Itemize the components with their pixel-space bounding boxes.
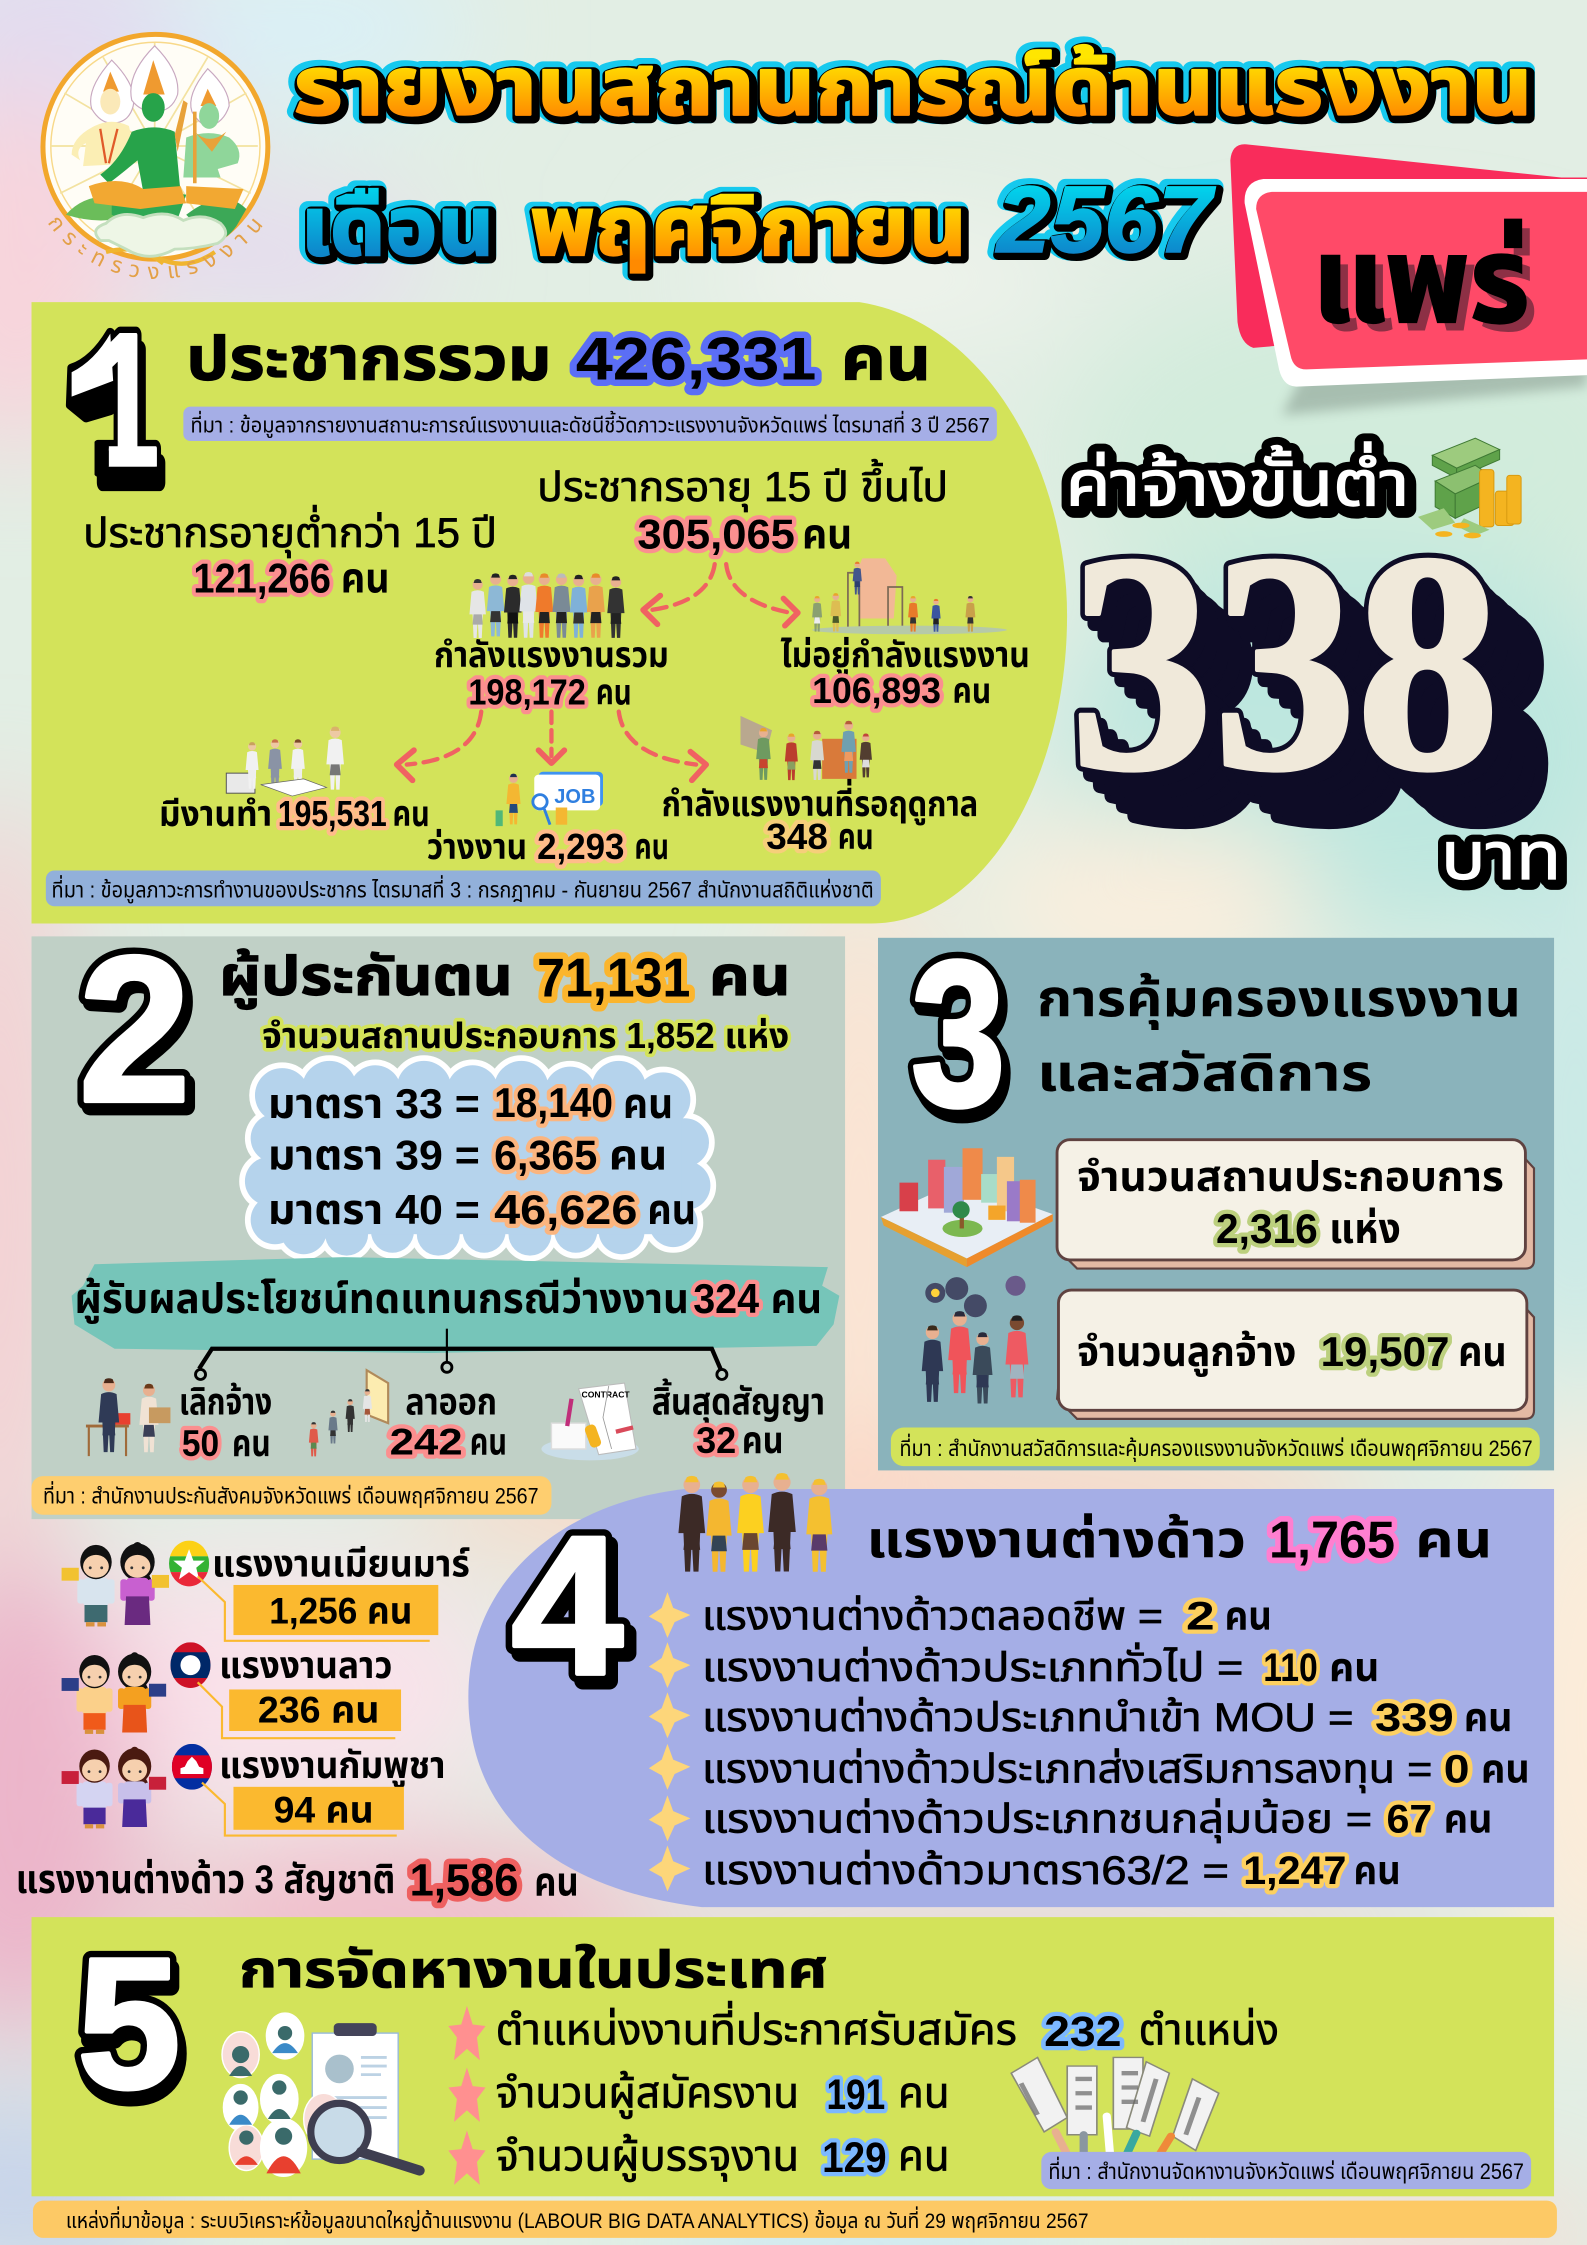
heading: total population xyxy=(186,325,931,392)
number 4: 4 xyxy=(511,1495,623,1716)
unit: baht: บาท xyxy=(1441,819,1561,893)
title: รายงานสถานการณ์ด้านแรงงาน xyxy=(296,44,1535,135)
heading: protection and welfare: การคุ้มครองแรงงาน xyxy=(1037,970,1521,1029)
label: contract ended: สิ้นสุดสัญญา xyxy=(652,1378,825,1425)
stat: population under 15: คน xyxy=(341,555,390,602)
label: unemployed xyxy=(427,827,669,867)
title: รายงานสถานการณ์ด้านแรงงาน xyxy=(294,42,1533,133)
label: employed xyxy=(159,794,430,834)
stat: population under 15: ประชากรอายุต่ำกว่า 15 ปี xyxy=(83,505,497,558)
row: section 63/2: แรงงานต่างด้าวมาตรา63/2 = xyxy=(702,1849,1229,1893)
banner: unemployment benefit xyxy=(72,1257,839,1353)
badge: province name xyxy=(1230,144,1587,415)
icon: employed group xyxy=(226,727,344,796)
title: 2567 xyxy=(995,167,1216,273)
number 3: 3 xyxy=(911,918,1005,1150)
heading: total population: ประชากรรวม xyxy=(186,325,551,392)
big number 338: 338 xyxy=(1077,499,1507,845)
badge: province name: แพร่ xyxy=(1321,223,1538,357)
badge: province name: แพร่ xyxy=(1312,214,1530,348)
nationality: Laos xyxy=(62,1642,401,1738)
heading: insured persons xyxy=(219,946,791,1010)
icon: job search xyxy=(496,772,603,826)
stat: population 15+: คน xyxy=(802,510,852,557)
article 33: คน xyxy=(623,1080,673,1127)
card: employees: จำนวนลูกจ้าง xyxy=(1077,1328,1296,1377)
label: employed: 195,531 xyxy=(278,794,387,834)
nationality: Laos: แรงงานลาว xyxy=(219,1644,392,1686)
icon: construction (outside labour force) xyxy=(812,558,1007,634)
total: three nationalities xyxy=(16,1855,579,1906)
big number 338: 338 xyxy=(1110,531,1540,877)
label: total labour force: คน xyxy=(596,672,632,712)
row: MOU: คน xyxy=(1464,1696,1513,1740)
number 4: 4 xyxy=(511,1495,623,1716)
row: minority xyxy=(649,1795,1492,1843)
label: outside labour force: คน xyxy=(952,671,991,711)
number 1 xyxy=(66,326,166,492)
label: seasonal labour: กำลังแรงงานที่รอฤดูกาล xyxy=(662,778,978,825)
article 33: 18,140 xyxy=(494,1079,613,1126)
source note 3 xyxy=(891,1427,1540,1466)
footer: data source xyxy=(33,2201,1557,2238)
row: investment promotion xyxy=(649,1744,1530,1793)
label: resigned xyxy=(390,1381,507,1463)
flag: Cambodia xyxy=(172,1744,212,1790)
title xyxy=(294,42,1535,276)
total: three nationalities: แรงงานต่างด้าว 3 สัญชาติ xyxy=(16,1857,395,1902)
number 3: 3 xyxy=(911,918,1005,1150)
number 2: 2 xyxy=(79,914,190,1146)
heading: total population: คน xyxy=(841,325,931,392)
nationality: Cambodia xyxy=(62,1744,445,1836)
row: minority: แรงงานต่างด้าวประเภทชนกลุ่มน้อย = xyxy=(702,1798,1372,1843)
heading: minimum wage: ค่าจ้างขั้นต่ำ xyxy=(1069,446,1412,524)
row: section 63/2: 1,247 xyxy=(1243,1849,1346,1893)
panel 5: job placement xyxy=(32,1917,1554,2196)
row: MOU: แรงงานต่างด้าวประเภทนำเข้า MOU = xyxy=(702,1696,1354,1740)
icon: seasonal farmers xyxy=(741,716,872,780)
row: minority: คน xyxy=(1444,1798,1492,1842)
crossed legs xyxy=(66,196,132,220)
card: establishments xyxy=(1057,1140,1534,1269)
label: dismissed: 50 xyxy=(182,1422,219,1464)
heading: minimum wage: ค่าจ้างขั้นต่ำ xyxy=(1066,441,1409,519)
central deity xyxy=(143,60,165,94)
title: รายงานสถานการณ์ด้านแรงงาน xyxy=(294,42,1533,133)
icon: Myanmar couple xyxy=(62,1542,169,1626)
panel 3: labour protection xyxy=(878,918,1554,1470)
big number 338: 338 xyxy=(1070,489,1500,835)
article 39: คน xyxy=(609,1132,667,1179)
title: พฤศจิกายน xyxy=(530,180,967,273)
row: MOU: 339 xyxy=(1375,1696,1454,1740)
article 39 xyxy=(268,1132,667,1179)
panel 2: insured persons xyxy=(32,914,845,1519)
heading: insured persons: 71,131 xyxy=(537,948,690,1009)
source note 2 xyxy=(46,871,881,906)
row: lifetime: คน xyxy=(1225,1594,1272,1638)
icon: Cambodia couple xyxy=(62,1747,166,1828)
flag: Myanmar xyxy=(169,1541,209,1588)
panel 4: migrant workers xyxy=(468,1473,1554,1907)
heading: migrant workers: แรงงานต่างด้าว xyxy=(867,1511,1246,1569)
icon: resigned xyxy=(309,1370,388,1456)
source note 1: ที่มา : ข้อมูลจากรายงานสถานะการณ์แรงงานและดัชนีชี้วัดภาวะแรงงานจังหวัดแพร่ ไตรมาสที่ 3 ปี 2567 xyxy=(190,410,990,438)
row: MOU xyxy=(649,1692,1513,1740)
row: investment promotion: แรงงานต่างด้าวประเภทส่งเสริมการลงทุน = xyxy=(702,1748,1432,1793)
icon: migrant worker group xyxy=(678,1473,832,1572)
article 33 xyxy=(268,1079,673,1127)
label: resigned: ลาออก xyxy=(405,1381,497,1423)
left deity xyxy=(103,72,119,92)
label: seasonal labour: 348 xyxy=(766,817,828,857)
row: placed xyxy=(448,2130,950,2185)
number 1: 1 xyxy=(90,293,159,509)
heading: migrant workers: 1,765 xyxy=(1269,1511,1395,1569)
label: unemployed: ว่างงาน xyxy=(427,827,527,867)
source note: social security xyxy=(32,1476,551,1515)
label: contract ended: คน xyxy=(742,1419,783,1461)
icon: recruitment search xyxy=(222,2013,420,2176)
title: 2567 xyxy=(998,170,1219,276)
article 40 xyxy=(268,1186,696,1233)
row: positions announced: ตำแหน่ง xyxy=(1139,2007,1279,2055)
footer: data source: แหล่งที่มาข้อมูล : ระบบวิเคราะห์ข้อมูลขนาดใหญ่ด้านแรงงาน (LABOUR BIG DATA ANALYTICS) ข้อมูล ณ วันที่ 29 พฤศจิกายน 2567 xyxy=(66,2206,1089,2234)
heading: insured persons: ผู้ประกันตน xyxy=(219,946,513,1010)
source note: social security: ที่มา : สำนักงานประกันสังคมจังหวัดแพร่ เดือนพฤศจิกายน 2567 xyxy=(43,1480,539,1508)
stat: population under 15: 121,266 xyxy=(193,555,331,602)
article 39: 6,365 xyxy=(494,1132,597,1179)
label: resigned: 242 xyxy=(390,1421,463,1463)
tree connector xyxy=(196,1329,727,1380)
stat: population 15+: ประชากรอายุ 15 ปี ขึ้นไป xyxy=(537,459,948,512)
icon: dismissed xyxy=(86,1378,170,1456)
row: general: คน xyxy=(1329,1646,1379,1690)
row: applicants: คน xyxy=(898,2070,950,2118)
article 39: มาตรา 39 = xyxy=(268,1132,480,1179)
nationality: Laos: 236 คน xyxy=(258,1688,380,1730)
arrows from labour force xyxy=(397,712,706,780)
icon: labour force group xyxy=(469,572,624,638)
arrows from population 15+ xyxy=(643,564,798,626)
label: total labour force xyxy=(434,635,669,712)
row: general xyxy=(649,1642,1379,1690)
logo: Ministry of Labour seal: กระทรวงแรงงาน xyxy=(48,218,262,279)
right deity xyxy=(201,89,216,106)
row: applicants: 191 xyxy=(826,2071,885,2119)
big number 338: 338 xyxy=(1087,511,1517,857)
label: unemployed: คน xyxy=(635,827,669,867)
row: placed: 129 xyxy=(822,2134,887,2182)
number 5: 5 xyxy=(77,1920,180,2127)
number 1: 1 xyxy=(95,308,163,523)
article 40: มาตรา 40 = xyxy=(268,1186,480,1233)
article 33: มาตรา 33 = xyxy=(268,1080,480,1127)
cloud xyxy=(96,214,226,256)
nationality: Myanmar xyxy=(62,1541,470,1641)
icon: Laos couple xyxy=(62,1652,166,1734)
label: dismissed: เลิกจ้าง xyxy=(179,1381,272,1423)
title: พฤศจิกายน xyxy=(533,183,970,276)
article 40: 46,626 xyxy=(494,1186,637,1233)
nationality: Myanmar: แรงงานเมียนมาร์ xyxy=(212,1542,470,1584)
title: เดือน xyxy=(301,180,494,273)
flag: Laos xyxy=(170,1642,211,1688)
label: seasonal labour xyxy=(662,778,978,857)
panel 1: population xyxy=(32,293,1067,923)
icon: contract ended: CONTRACT xyxy=(582,1389,630,1399)
logo: Ministry of Labour seal xyxy=(40,32,270,279)
cloud: contributions by article xyxy=(245,1061,710,1256)
source note 2: ที่มา : ข้อมูลภาวะการทำงานของประชากร ไตรมาสที่ 3 : กรกฎาคม - กันยายน 2567 สำนักงานสถิติแห่งชาติ xyxy=(52,875,874,905)
card: employees xyxy=(1057,1290,1534,1419)
icon: city xyxy=(881,1148,1053,1267)
label: dismissed xyxy=(179,1381,272,1464)
row: investment promotion: 0 xyxy=(1444,1748,1470,1792)
row: investment promotion: คน xyxy=(1481,1748,1530,1792)
heading: minimum wage: ค่าจ้างขั้นต่ำ xyxy=(1066,441,1409,519)
big number 338: 338 xyxy=(1070,489,1500,835)
heading: insured persons: คน xyxy=(709,946,791,1007)
article 40: คน xyxy=(647,1186,696,1233)
source note 5: ที่มา : สำนักงานจัดหางานจังหวัดแพร่ เดือนพฤศจิกายน 2567 xyxy=(1048,2156,1524,2184)
heading: migrant workers xyxy=(867,1511,1492,1569)
icon: contract ended xyxy=(541,1383,639,1460)
stat: population 15+ xyxy=(537,459,948,557)
row: lifetime xyxy=(649,1592,1272,1638)
label: dismissed: คน xyxy=(232,1422,271,1464)
row: positions announced: ตำแหน่งงานที่ประกาศรับสมัคร xyxy=(496,2001,1017,2055)
label: resigned: คน xyxy=(470,1421,507,1463)
number 2: 2 xyxy=(83,920,195,1152)
row: section 63/2 xyxy=(649,1846,1401,1893)
label: outside labour force: 106,893 xyxy=(812,671,941,711)
row: placed: คน xyxy=(898,2133,950,2181)
source note 1 xyxy=(183,407,997,441)
row: applicants xyxy=(448,2067,950,2122)
label: outside labour force xyxy=(781,635,1030,711)
row: lifetime: แรงงานต่างด้าวตลอดชีพ = xyxy=(702,1594,1163,1638)
label: contract ended xyxy=(652,1378,825,1461)
banner: unemployment benefit: ผู้รับผลประโยชน์ทดแทนกรณีว่างงาน xyxy=(74,1275,689,1324)
heading: domestic job placement: การจัดหางานในประเทศ xyxy=(239,1940,828,1998)
title: 2567 xyxy=(995,167,1216,273)
card: establishments: 2,316 xyxy=(1216,1205,1318,1252)
minimum wage block xyxy=(1066,438,1564,896)
source note 5 xyxy=(1041,2152,1531,2189)
number 3: 3 xyxy=(915,926,1010,1157)
nationality: Cambodia: แรงงานกัมพูชา xyxy=(219,1744,445,1788)
row: section 63/2: คน xyxy=(1354,1849,1401,1893)
label: total labour force: 198,172 xyxy=(468,672,586,712)
row: general: 110 xyxy=(1263,1646,1318,1690)
unit: baht: บาท xyxy=(1441,819,1561,893)
heading: migrant workers: คน xyxy=(1415,1511,1492,1569)
banner: unemployment benefit: 324 xyxy=(693,1275,759,1322)
icon: hands holding resumes xyxy=(1011,2057,1219,2155)
row: general: แรงงานต่างด้าวประเภททั่วไป = xyxy=(702,1642,1243,1690)
number 2: 2 xyxy=(79,914,190,1146)
row: minority: 67 xyxy=(1386,1798,1432,1842)
number 5: 5 xyxy=(80,1928,183,2136)
label: employed: มีงานทำ xyxy=(159,794,272,834)
label: unemployed: 2,293 xyxy=(537,827,624,867)
banner: unemployment benefit: คน xyxy=(771,1275,822,1322)
row: positions announced: 232 xyxy=(1044,2008,1121,2056)
title: เดือน xyxy=(304,183,497,276)
heading: protection and welfare: และสวัสดิการ xyxy=(1037,1044,1372,1102)
title: เดือน xyxy=(301,180,494,273)
label: total labour force: กำลังแรงงานรวม xyxy=(434,635,669,675)
total: three nationalities: คน xyxy=(534,1861,579,1905)
icon: people with ideas xyxy=(922,1276,1028,1404)
label: outside labour force: ไม่อยู่กำลังแรงงาน xyxy=(781,635,1030,676)
label: seasonal labour: คน xyxy=(838,817,874,857)
label: contract ended: 32 xyxy=(696,1419,736,1461)
row: applicants: จำนวนผู้สมัครงาน xyxy=(496,2070,799,2119)
heading: protection and welfare xyxy=(1037,970,1521,1102)
stat: population under 15 xyxy=(83,505,497,602)
icon: money xyxy=(1418,438,1521,538)
card: establishments: จำนวนสถานประกอบการ xyxy=(1077,1153,1504,1200)
total: three nationalities: 1,586 xyxy=(410,1855,518,1906)
subheading: establishments: จำนวนสถานประกอบการ 1,852 แห่ง xyxy=(262,1016,789,1056)
card: employees: 19,507 xyxy=(1321,1328,1449,1375)
halos xyxy=(91,46,229,126)
number 4: 4 xyxy=(517,1502,629,1723)
card: establishments: แห่ง xyxy=(1329,1205,1401,1252)
big number 338: 338 xyxy=(1099,521,1528,867)
number 1: 1 xyxy=(90,293,159,509)
unit: baht: บาท xyxy=(1444,822,1564,896)
row: positions announced xyxy=(448,2001,1279,2060)
number 5: 5 xyxy=(77,1920,180,2127)
nationality: Myanmar: 1,256 คน xyxy=(269,1590,413,1632)
row: placed: จำนวนผู้บรรจุงาน xyxy=(496,2133,799,2182)
heading: total population: 426,331 xyxy=(576,325,816,392)
row: lifetime: 2 xyxy=(1186,1594,1215,1638)
stat: population 15+: 305,065 xyxy=(637,510,795,557)
icon: job search: JOB xyxy=(554,786,595,808)
nationality: Cambodia: 94 คน xyxy=(274,1789,374,1831)
title: พฤศจิกายน xyxy=(530,180,967,273)
card: employees: คน xyxy=(1458,1328,1507,1375)
big number 338: 338 xyxy=(1121,541,1551,887)
label: employed: คน xyxy=(392,794,430,834)
